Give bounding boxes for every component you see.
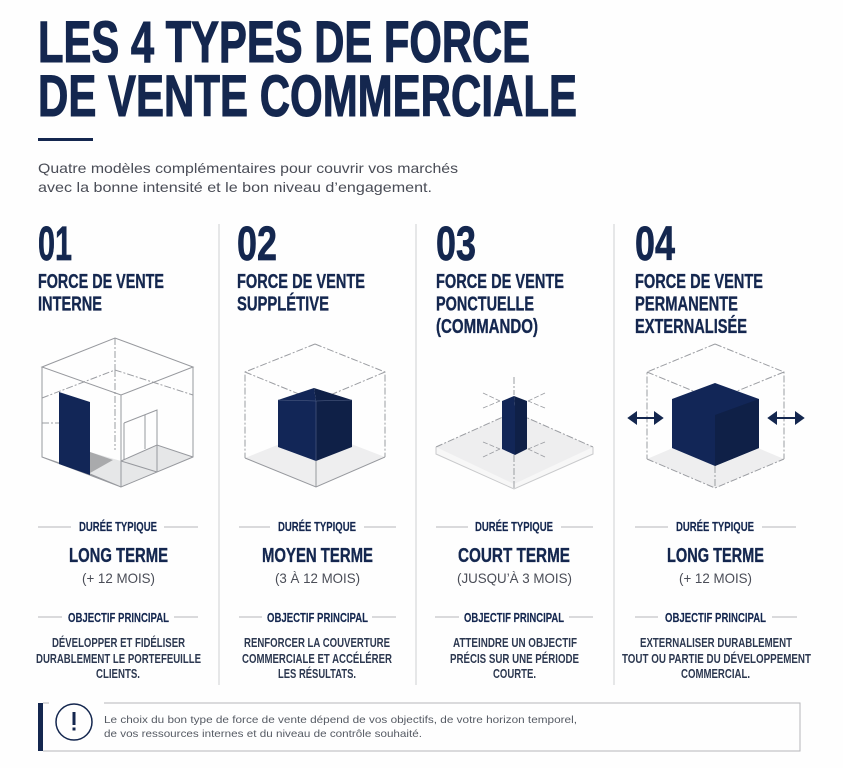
subtitle: avec la bonne intensité et le bon niveau d’engagement. — [38, 179, 432, 195]
panel: force de vente supplétive — [237, 218, 396, 681]
heading 02: FORCE DE VENTE — [237, 271, 365, 293]
objective text 02: LES RÉSULTATS. — [278, 666, 356, 681]
duration label 04: DURÉE TYPIQUE — [676, 519, 754, 534]
title rule — [38, 138, 93, 141]
icon: open room with navy panel — [42, 338, 193, 487]
objective text 03: COURTE. — [493, 667, 536, 681]
objective text 01 — [36, 635, 201, 681]
objective text 03: ATTEINDRE UN OBJECTIF — [453, 636, 577, 650]
callout — [38, 703, 800, 751]
heading 03: (COMMANDO) — [436, 316, 538, 338]
heading 04: PERMANENTE — [635, 294, 738, 316]
heading 01 — [38, 271, 164, 316]
objective text 04: COMMERCIAL. — [681, 667, 750, 681]
objective label 02: OBJECTIF PRINCIPAL — [267, 611, 368, 625]
icon: large navy cube with arrows — [629, 344, 803, 488]
duration value 02: (3 À 12 MOIS) — [275, 570, 360, 586]
title: DE VENTE COMMERCIALE — [38, 64, 577, 129]
callout text: Le choix du bon type de force de vente dépend de vos objectifs, de votre horizon temporel, — [104, 714, 577, 726]
duration value 04: LONG TERME — [667, 545, 764, 567]
heading 04: FORCE DE VENTE — [635, 271, 763, 293]
heading 03: PONCTUELLE — [436, 294, 534, 316]
heading 01: FORCE DE VENTE — [38, 271, 164, 293]
icon: right arrow — [769, 413, 803, 423]
heading 03: FORCE DE VENTE — [436, 271, 564, 293]
objective text 01: DÉVELOPPER ET FIDÉLISER — [52, 635, 185, 650]
objective text 04: EXTERNALISER DURABLEMENT — [640, 636, 792, 650]
objective label 03: OBJECTIF PRINCIPAL — [464, 611, 564, 625]
title — [38, 10, 577, 129]
duration value 02 — [262, 545, 373, 586]
heading 02: SUPPLÉTIVE — [237, 292, 329, 316]
objective label 01: OBJECTIF PRINCIPAL — [68, 611, 169, 625]
panel: force de vente ponctuelle — [435, 218, 593, 681]
number 01: 01 — [38, 218, 72, 271]
duration value 04 — [667, 545, 764, 586]
objective text 03: PRÉCIS SUR UNE PÉRIODE — [450, 651, 579, 666]
objective text 01: DURABLEMENT LE PORTEFEUILLE — [36, 652, 201, 666]
duration label 02: DURÉE TYPIQUE — [278, 519, 356, 534]
objective text 02: RENFORCER LA COUVERTURE — [244, 636, 390, 650]
duration value 03 — [457, 545, 572, 586]
number 03: 03 — [436, 218, 476, 271]
objective text 01: CLIENTS. — [96, 667, 140, 681]
callout text — [104, 714, 577, 740]
icon: navy cube in dashed frame — [245, 344, 385, 487]
objective text 03 — [450, 636, 579, 681]
title: LES 4 TYPES DE FORCE — [38, 10, 530, 75]
icon: narrow pillar on platform — [436, 377, 593, 489]
objective text 04 — [622, 636, 811, 681]
heading 02 — [237, 271, 365, 316]
objective label 04: OBJECTIF PRINCIPAL — [665, 611, 766, 625]
heading 04 — [635, 271, 763, 338]
number 04: 04 — [635, 218, 675, 271]
icon: left arrow — [629, 413, 662, 423]
heading 01: INTERNE — [38, 294, 102, 316]
duration value 01 — [69, 545, 168, 586]
heading 03 — [436, 271, 564, 338]
duration value 04: (+ 12 MOIS) — [679, 570, 752, 586]
duration value 03: COURT TERME — [458, 545, 570, 567]
number 02: 02 — [237, 218, 277, 271]
duration value 03: (JUSQU’À 3 MOIS) — [457, 570, 572, 586]
heading 04: EXTERNALISÉE — [635, 315, 747, 338]
objective text 02: COMMERCIALE ET ACCÉLÉRER — [242, 651, 392, 666]
duration label 01: DURÉE TYPIQUE — [79, 519, 157, 534]
callout text: de vos ressources internes et du niveau de contrôle souhaité. — [104, 728, 422, 740]
duration value 01: (+ 12 MOIS) — [82, 570, 155, 586]
icon: exclamation — [56, 704, 92, 740]
panel: force de vente permanente externalisée — [622, 218, 811, 681]
panel: force de vente interne — [36, 218, 201, 681]
duration value 01: LONG TERME — [69, 545, 168, 567]
duration label 03: DURÉE TYPIQUE — [475, 519, 553, 534]
objective text 02 — [242, 636, 392, 681]
subtitle: Quatre modèles complémentaires pour couvrir vos marchés — [38, 160, 458, 176]
subtitle — [38, 160, 458, 195]
duration value 02: MOYEN TERME — [262, 545, 373, 567]
